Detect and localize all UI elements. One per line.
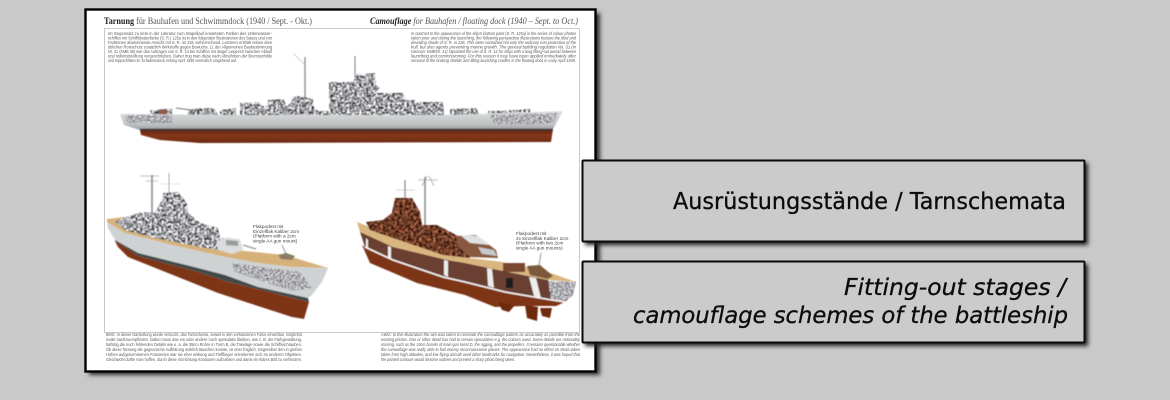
text block: German intro: Nr. 31 (KMB 35) war das Auftragen von S. R. 14 bei Schiffen mit langer Liegezeit zwischen Ablauf bbox=[108, 49, 273, 54]
brown ship white stripes bbox=[366, 238, 541, 298]
text block: German intro: und Indienststellung vorgeschrieben. Daher trug man diese nach Abnehmen der Bremsschilde bbox=[108, 54, 272, 58]
callout: grey ship gun platform: Einzelflak Kaliber 2cm bbox=[253, 229, 299, 234]
callout: brown ship gun platform: Flakpodest mit bbox=[516, 231, 547, 236]
grey ship superstructure bbox=[115, 192, 230, 252]
text block: German intro: schiffes mit Schiffsbodenfarbe (S. R.) 125a ist in den folgenden Illustrationen des Baues und von bbox=[108, 36, 272, 40]
text block: German caption: exakt nachzuempfinden. Dabei muss das ein oder andere noch spekulativ bleiben, wie z. B. die Farbgestaltung, bbox=[106, 337, 302, 342]
grey ship forward turrets bbox=[217, 238, 243, 254]
panel: English label box bbox=[582, 262, 1088, 346]
text block: German intro bbox=[108, 31, 273, 63]
text block: German caption: BMG: In dieser Darstellung wurde versucht, das Tarnschema, soweit in den vorhandenen Fotos einsehbar, möglichst bbox=[106, 332, 303, 337]
callout: brown ship gun platform: single AA gun mounts) bbox=[516, 245, 563, 250]
text block: English caption: AWG: In this illustration the aim was taken to recreate the camouflage pattern as accurately as possible from the bbox=[380, 332, 581, 337]
brown ship deck blocks bbox=[503, 263, 525, 272]
brown ship lower hull bbox=[362, 245, 565, 307]
text block: English intro: taken prior and during the launching, the following perspective illustrations feature the tiled and bbox=[411, 36, 576, 40]
grey ship deck bbox=[107, 217, 328, 268]
text block: German caption bbox=[106, 332, 303, 362]
text block: German intro: Im Gegensatz zu dem in der Literatur zum Stapellauf erwarteten Farben des Unterwasser- bbox=[108, 31, 272, 36]
icon: side view masts bbox=[293, 53, 355, 104]
text block: English intro: removal of the braking shields and tilting launching cradles in the floating dock in early April 1939. bbox=[411, 58, 576, 63]
text block: German intro: und Kippschlitten im Schwimmdock Anfang April 1939 vermutlich umgehend auf. bbox=[108, 58, 237, 63]
text block: English caption: taken from high altitudes, and low-flying aircraft used other landmarks for navigation. Nevertheless, it was hoped that bbox=[381, 352, 581, 357]
text block: German intro: üblichen Rostschutz zusätzlich Wirkstoffe gegen Bewuchs. Lt. der Allgemeinen Baubestimmung bbox=[108, 44, 272, 50]
grey ship callout leader bbox=[282, 245, 286, 254]
side view red underwater hull bbox=[140, 129, 553, 143]
panel: magazine page bbox=[86, 10, 600, 375]
grey ship gun platform bbox=[278, 253, 295, 260]
side view grey hull bbox=[120, 111, 563, 130]
brown ship rudders and propellers bbox=[498, 302, 552, 321]
callout: brown ship gun platform: 2x Einzelflak Kaliber 2cm bbox=[516, 236, 568, 241]
text block: English caption: missing, such as the 15cm barrels of main gun turret D, the rigging, and the propellers. It remains questionable whether bbox=[381, 342, 580, 347]
ship: brown perspective view bbox=[357, 176, 576, 321]
side view aft turrets bbox=[150, 108, 236, 115]
text block: German caption: Ob diese Tarnung die gegnerische Aufklärung wirklich täuschen konnte, ist eher fraglich. Gegenüber den in großen bbox=[106, 347, 302, 352]
grey ship bow camouflage bbox=[232, 263, 312, 291]
grey ship red underhull bbox=[115, 241, 309, 319]
text block: English caption: existing photos. One or other detail has had to remain speculative e.g. the colours used. Some details are noticeably bbox=[381, 337, 581, 342]
callout: grey ship gun platform: (Platform with a 2cm bbox=[253, 234, 296, 239]
brown ship forward turrets bbox=[456, 235, 498, 258]
text block: English intro bbox=[411, 31, 577, 63]
callout: grey ship gun platform bbox=[253, 224, 299, 243]
ship: side view bbox=[120, 53, 563, 143]
side view forward turrets bbox=[450, 108, 530, 115]
text block: German caption: Gleichwohl durfte man hoffen, durch diese Vorrichtung Kontouren aufzulösen und damit ein klares Bild zu verhindern. bbox=[106, 357, 302, 362]
panel: German label box bbox=[582, 160, 1088, 245]
brown ship marking bbox=[506, 278, 513, 288]
text block: English intro: In contrast to the appearance of the ship's bottom paint (S. R. 125a) in the series of colour photos bbox=[411, 31, 577, 36]
brown ship bow camouflage bbox=[548, 281, 576, 302]
grey ship hull bbox=[107, 222, 328, 298]
text block: English intro: launching and commissioning. For this reason it may have been applied immediately after bbox=[411, 54, 577, 58]
brown ship hull side bbox=[360, 232, 552, 300]
heading: English label: camouflage schemes of the battleship bbox=[633, 303, 1068, 329]
brown ship superstructure bbox=[366, 198, 470, 258]
text block: German intro: Farbtönen abweichende Ansicht mit S. R. im 226 vorherrschend. Letzterer enthält neben dem bbox=[108, 40, 272, 45]
side view hull camouflage bbox=[124, 113, 558, 124]
text block: German caption: Höhen aufgenommenen Fotoserien war sie eher wirkung und Tiefflieger orientierten sich an anderen Objekten. bbox=[106, 352, 302, 357]
callout: brown ship gun platform bbox=[516, 231, 568, 250]
heading: German label: Ausrüstungsstände / Tarnschemata bbox=[673, 189, 1066, 215]
callout: grey ship gun platform: single AA gun mount) bbox=[253, 238, 298, 243]
grey ship masts bbox=[140, 173, 180, 214]
text block: English caption bbox=[380, 332, 581, 362]
callout: brown ship gun platform: (Platform with two 2cm bbox=[516, 241, 564, 246]
heading: English label bbox=[633, 275, 1068, 329]
text block: English intro: German: KMB/Nr. 31) stipulated the use of S. R. 14 for ships with a long fitting-out period between bbox=[411, 49, 576, 54]
grey ship boot-top band bbox=[115, 240, 309, 302]
side view superstructure bbox=[240, 73, 444, 115]
heading: English title: Camouflage for Bauhafen / floating dock (1940 – Sept. to Oct.) bbox=[370, 16, 578, 27]
heading: German title: Tarnung für Bauhafen und Schwimmdock (1940 / Sept. - Okt.) bbox=[104, 16, 312, 27]
text block: English caption: the pointed contours would dissolve outlines and prevent a sharp photo being taken. bbox=[381, 357, 515, 362]
text block: English caption: the camouflage was really able to fool enemy reconnaissance planes. The appearance had no effect on shots taken bbox=[381, 347, 580, 352]
callout: grey ship gun platform: Flakpodest mit bbox=[253, 224, 284, 229]
ship: grey perspective view bbox=[107, 173, 328, 319]
brown ship deck bbox=[357, 222, 576, 282]
text block: English intro: deviating shade of S. R. in 226. This latter contained not only the ordinary rust protection of the bbox=[411, 40, 576, 45]
text block: German caption: haftstig die noch fehlenden Details wie u. a. die 38cm Rohre in Turm B, die Takelage sowie die Schiffsschrauben. bbox=[106, 342, 302, 347]
heading: English label: Fitting-out stages / bbox=[844, 275, 1068, 301]
brown ship masts bbox=[396, 176, 438, 226]
text block: English intro: hull, but also agents preventing marine growth. The general building regulation No. 31 (in bbox=[411, 44, 577, 50]
